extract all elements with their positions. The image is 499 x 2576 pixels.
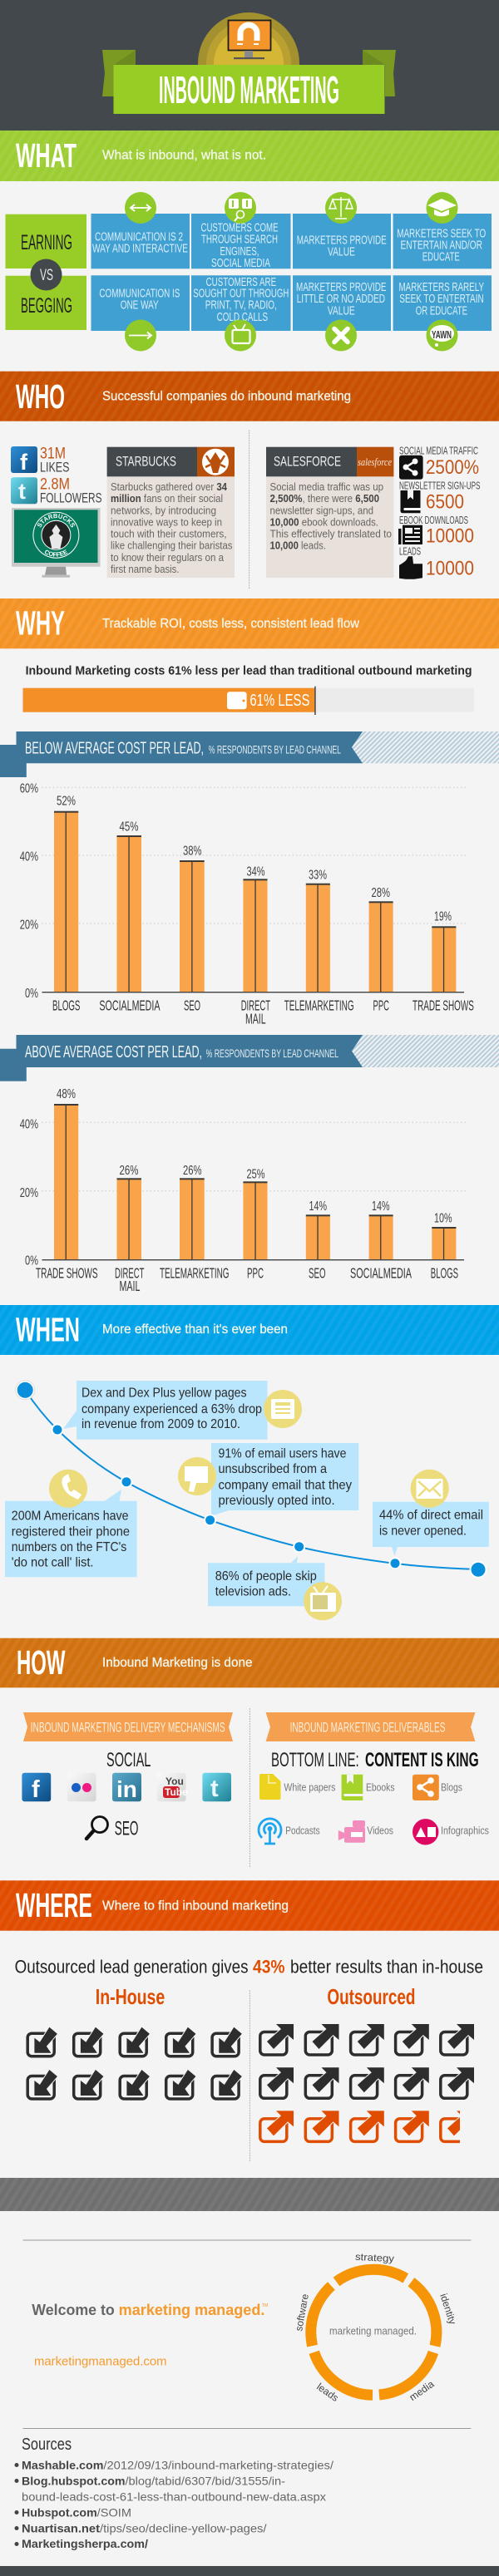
icon: monitor with starbucks logo: COFFEE [45,549,68,557]
salesforce body text: This effectively translated to [269,527,392,540]
category labels [36,1264,458,1294]
ribbon: deliverables [266,1712,475,1741]
icon: twitter: t [18,479,26,504]
starbucks body text: first name basis. [111,563,180,575]
blogs: Blogs [441,1781,462,1793]
chart heading: below average: BELOW AVERAGE COST PER LEAD, [25,739,204,758]
value labels: 10% [434,1211,452,1225]
category labels: MAIL [120,1278,141,1294]
value labels [57,1087,452,1225]
icon: scales [325,192,357,224]
value labels: 14% [372,1199,389,1214]
ribbon: delivery mechanisms [23,1712,233,1741]
ring diagram [293,2251,458,2404]
chart heading: above average [0,1035,499,1081]
icon: monitor with starbucks logo [12,508,100,578]
icon: facebook [22,1773,51,1803]
category labels: MAIL [245,1010,266,1027]
section band: what: WHAT [16,136,77,175]
section band: how: HOW [17,1643,66,1682]
category labels [52,997,474,1027]
chart heading: below average: % RESPONDENTS BY LEAD CHANNEL [209,743,341,756]
callout: email unsubscribed: 91% of email users have [218,1446,346,1460]
icon: youtube: Tube [165,1786,188,1798]
bar chart: below average cost per lead: 20% [20,918,38,932]
twitter stat: 2.8M [40,476,70,494]
sources: /SOIM [97,2505,131,2519]
leads stat: LEADS [399,545,421,557]
icon: youtube: You [166,1776,184,1787]
icon row: highlighted outbound arrows [260,2111,474,2141]
website link: marketingmanaged.com [34,2355,166,2369]
panel: outsourced [260,1984,474,2141]
why statement: Inbound Marketing costs 61% less per lead than traditional outbound marketing [26,664,472,678]
sources: /tips/seo/decline-yellow-pages/ [100,2521,267,2534]
infographics: Infographics [441,1825,489,1837]
social heading: SOCIAL [106,1749,151,1771]
category labels: DIRECT [115,1264,145,1281]
newsletter stat: 6500 [426,491,464,514]
begging cells: CUSTOMERS ARE [206,276,276,289]
begging cells: COMMUNICATION IS [99,287,180,300]
white papers: White papers [284,1781,336,1793]
section band: what: What is inbound, what is not. [102,149,266,163]
callout: yellow pages: company experienced a 63% drop [82,1402,262,1416]
facebook stat: LIKES [40,459,70,475]
sources: Marketingsherpa.com/ [22,2537,148,2550]
icon grid: inbound arrows [27,2027,242,2099]
begging label: BEGGING [21,294,72,318]
icon: phone [49,1470,87,1508]
outsourced statement: 43% [253,1956,284,1977]
value labels: 45% [120,820,138,835]
seo label: SEO [115,1817,138,1840]
category labels: DIRECT [241,997,270,1014]
section band: where: WHERE [16,1886,92,1924]
panel: deliverables [259,1749,489,1845]
grey divider band [0,2178,499,2211]
earning label: EARNING [21,231,72,254]
callout: direct email: is never opened. [379,1524,467,1538]
section band: where [0,1880,499,1931]
value labels: 19% [434,910,452,924]
bar chart: above average cost per lead: 0% [25,1254,38,1268]
panel: starbucks card [107,447,235,578]
starbucks body text: like challenging their baristas [111,539,233,552]
bar chart: above average cost per lead: 40% [20,1117,38,1131]
ring diagram: software [293,2293,311,2332]
salesforce logo: salesforce [358,456,392,468]
value labels: 48% [57,1087,76,1101]
panel: in-house: In-House [96,1984,165,2009]
callout: television ads: television ads. [215,1585,291,1599]
category labels: SEO [309,1264,326,1281]
callout: yellow pages: in revenue from 2009 to 2010. [82,1417,240,1431]
category labels: PPC [373,997,389,1014]
bottom line heading [271,1749,479,1771]
header [0,0,499,131]
icon: television [304,1582,342,1620]
chart heading: above average: % RESPONDENTS BY LEAD CHANNEL [206,1047,338,1060]
callout: yellow pages [63,1381,302,1440]
timeline curve [25,1390,478,1569]
starbucks body text: Starbucks gathered over 34 [111,480,228,493]
section band: when [0,1305,499,1355]
icon: envelope [411,1470,449,1508]
sources [15,2436,333,2550]
icon: twitter: t [210,1776,219,1802]
sources: Blog.hubspot.com [22,2475,125,2488]
section band: who [0,372,499,421]
callout: television ads [208,1556,342,1620]
begging cells: COLD CALLS [217,311,268,324]
icon: facebook [11,446,37,475]
category labels: TELEMARKETING [284,997,354,1014]
callout: email unsubscribed: company email that they [218,1478,352,1492]
value labels: 28% [371,886,390,900]
earning cells: EDUCATE [422,251,460,264]
ebooks: Ebooks [366,1781,395,1793]
leads stat: 10000 [426,558,474,580]
starbucks body text: to know their regulars on a [111,551,225,564]
icon: monitor with magnet on golden dome [198,12,299,65]
callout: email unsubscribed [178,1443,358,1516]
callout: email unsubscribed: unsubscribed from a [218,1462,327,1476]
salesforce body text: newsletter sign-ups, and [269,504,373,516]
vs badge [30,259,62,291]
callout: direct email [373,1470,489,1556]
callout: do not call: numbers on the FTC's [12,1540,126,1554]
starbucks body text [111,480,233,575]
bar chart: below average cost per lead: 0% [25,987,38,1001]
ring diagram: identity [437,2293,458,2326]
icon: linkedin [112,1773,141,1802]
ring diagram: media [408,2378,437,2403]
progress bar: 61% less [23,687,474,715]
ring diagram: marketing managed. [329,2326,417,2337]
infographics [413,1819,489,1845]
value labels: 26% [183,1164,201,1178]
earning cells: ENGINES, [220,245,259,259]
twitter stat [40,476,101,506]
ribbon: delivery mechanisms: INBOUND MARKETING DELIVERY MECHANISMS [31,1719,225,1735]
icon: one way arrow [125,319,156,351]
sources: Mashable.com [22,2459,103,2472]
ring diagram: leads [314,2381,341,2404]
bars [54,812,456,992]
section band: when: WHEN [16,1310,80,1348]
salesforce body text: Social media traffic was up [269,480,383,493]
section band: what [0,131,499,181]
sources: Hubspot.com [22,2505,97,2519]
callout: do not call: registered their phone [12,1524,130,1539]
sources: /2012/09/13/inbound-marketing-strategies/ [103,2459,333,2472]
category labels: SOCIALMEDIA [350,1264,412,1281]
sources: Sources [22,2436,72,2454]
earning cells: VALUE [328,245,355,259]
starbucks body text: million fans on their social [111,492,223,505]
vs badge: VS [40,267,53,284]
begging label [5,276,86,330]
starbucks body text: touch with their customers, [111,527,226,540]
icon: flickr [67,1773,96,1801]
category labels: TRADE SHOWS [36,1264,98,1281]
bar chart: below average cost per lead: 40% [20,850,38,864]
icon: starbucks siren [202,449,229,475]
podcasts: Podcasts [285,1825,320,1837]
begging cells: VALUE [328,304,355,318]
icon grid: outbound arrows [260,2024,474,2098]
begging cells [91,275,492,331]
value labels [57,794,452,924]
icon: two way arrow [125,192,156,224]
icon: x mark [325,319,357,351]
starbucks body text: innovative ways to keep in [111,515,222,528]
blogs [413,1775,462,1800]
panel: salesforce card: SALESFORCE [274,454,341,470]
icon: monitor with starbucks logo: STARBUCKS [37,514,75,527]
bar chart: below average cost per lead: 60% [20,781,38,795]
videos: Videos [367,1825,393,1837]
value labels: 14% [309,1199,327,1214]
ebook downloads stat: 10000 [426,525,474,547]
section band: how [0,1638,499,1687]
ebooks [342,1775,395,1800]
begging cells: LITTLE OR NO ADDED [297,293,385,306]
category labels: SEO [184,997,200,1014]
panel: starbucks social stats [11,446,101,578]
begging cells: OR EDUCATE [416,304,467,318]
icon: thumbs down [178,1457,216,1495]
ring diagram: strategy [355,2251,394,2264]
outsourced statement: Outsourced lead generation gives [15,1956,248,1977]
earning label [5,214,86,268]
sources: Nuartisan.net [22,2521,100,2534]
callout: television ads: 86% of people skip [215,1569,317,1584]
category labels: PPC [247,1264,264,1281]
icon: tv [225,319,256,351]
panel: delivery mechanisms [22,1749,231,1840]
bar chart: above average cost per lead [20,1087,466,1294]
earning cells: THROUGH SEARCH [201,234,278,247]
icon: twitter [202,1773,231,1802]
icon: linkedin: in [116,1776,137,1802]
value labels: 34% [246,864,264,879]
social media traffic stat [399,446,479,480]
starbucks body text: networks, by introducing [111,504,216,516]
earning cells: COMMUNICATION IS 2 [95,230,183,244]
section band: why: WHY [16,603,65,642]
panel: starbucks card: STARBUCKS [116,454,176,470]
begging cells: MARKETERS PROVIDE [296,281,387,294]
earning cells: SOCIAL MEDIA [211,257,270,270]
earning cells: WAY AND INTERACTIVE [92,242,188,255]
earning cells: MARKETERS PROVIDE [297,234,387,247]
value labels: 38% [183,845,201,859]
icon: facebook: f [20,450,28,475]
facebook stat [40,446,70,475]
section band: when: More effective than it's ever been [102,1322,288,1337]
panel: salesforce stats [398,446,481,580]
value labels: 25% [246,1167,264,1181]
icon: youtube [157,1773,188,1801]
welcome text [32,2302,268,2318]
newsletter stat [399,480,481,514]
section band: who: WHO [16,377,65,416]
social media traffic stat: 2500% [426,456,479,479]
podcasts [259,1819,320,1844]
icon: yawn bubble: YAWN [432,328,452,341]
icon: magnifier [86,1817,108,1839]
value labels: 26% [120,1164,138,1178]
icon: newspaper [264,1390,302,1428]
value labels: 52% [57,794,76,808]
category labels: BLOGS [431,1264,458,1281]
videos [338,1820,393,1843]
panel: in-house [27,1984,242,2099]
callout: direct email: 44% of direct email [379,1508,483,1522]
callout: do not call: 200M Americans have [12,1509,129,1523]
category labels: TELEMARKETING [160,1264,230,1281]
panel: outsourced: Outsourced [327,1984,415,2009]
icon: twitter [11,477,37,504]
white papers [259,1774,336,1800]
timeline dots [16,1381,487,1579]
ribbon banner [102,50,396,114]
section band: why: Trackable ROI, costs less, consistent lead flow [102,617,359,631]
bottom line heading: BOTTOM LINE: [271,1749,359,1771]
callout: yellow pages: Dex and Dex Plus yellow pages [82,1387,247,1401]
chart heading: below average [0,731,499,777]
twitter stat: FOLLOWERS [40,490,101,506]
progress bar: 61% less: 61% LESS [250,692,309,710]
facebook stat: 31M [40,446,66,463]
ebook downloads stat [398,515,474,547]
icon: graduation cap [426,192,457,224]
earning cells: CUSTOMERS COME [201,222,279,235]
section band: why [0,598,499,648]
callout: email unsubscribed: previously opted into. [218,1494,335,1508]
salesforce body text: 2,500%, there were 6,500 [269,492,379,505]
begging cells: SOUGHT OUT THROUGH [193,288,289,301]
salesforce body text: 10,000 leads. [269,539,326,552]
welcome text: Welcome to [32,2302,115,2318]
callout: do not call: 'do not call' list. [12,1556,93,1570]
begging cells: ONE WAY [121,298,159,312]
outsourced statement [15,1956,483,1977]
bar chart: below average cost per lead [20,781,474,1027]
icon: yawn bubble [426,319,457,351]
value labels: 33% [309,868,327,882]
bar chart: above average cost per lead: 20% [20,1186,38,1200]
chart heading: above average: ABOVE AVERAGE COST PER LEAD, [25,1042,202,1061]
category labels: SOCIALMEDIA [99,997,161,1014]
callout: do not call [5,1470,137,1577]
salesforce body text: 10,000 ebook downloads. [269,515,378,528]
panel: salesforce card [266,447,393,578]
sources: bound-leads-cost-61-less-than-outbound-new-data.aspx [22,2490,326,2504]
salesforce body text [269,480,392,552]
section band: who: Successful companies do inbound marketing [102,389,351,403]
welcome text: TM [262,2303,268,2308]
footer band [0,2566,499,2576]
earning cells [91,214,492,270]
icon: wallet [227,692,247,709]
welcome text: marketing managed. [119,2302,264,2318]
bars [54,1105,456,1260]
leads stat [399,545,474,580]
section band: where: Where to find inbound marketing [102,1899,289,1913]
sources: /blog/tabid/6307/bid/31555/in- [125,2475,285,2488]
icon: social and search [225,192,256,224]
icon: facebook: f [32,1776,40,1803]
category labels: BLOGS [52,997,80,1014]
begging cells: PRINT, TV, RADIO, [205,299,277,313]
section band: how: Inbound Marketing is done [102,1656,253,1670]
panel: earning vs begging table [5,192,492,351]
